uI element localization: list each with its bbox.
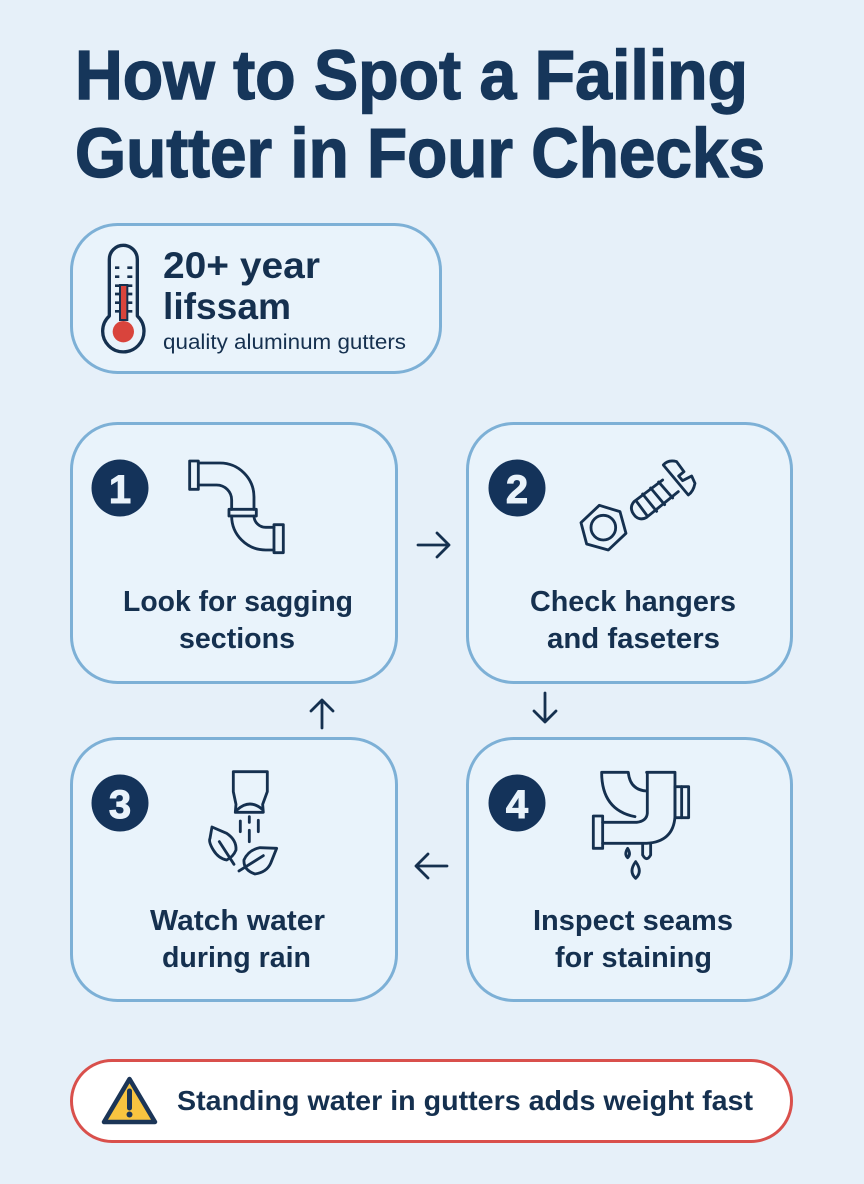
icon: spout and leaves xyxy=(210,772,277,874)
icon: bolt and nut xyxy=(581,461,695,550)
title: How to Spot a Failing xyxy=(75,36,748,114)
badge 1: 1 xyxy=(109,468,131,512)
badge 3 xyxy=(92,774,148,832)
step 4 label: Inspect seams xyxy=(533,905,733,937)
stat heading: 20+ year xyxy=(163,245,320,286)
step 1 label: sections xyxy=(179,623,295,655)
badge 4: 4 xyxy=(506,783,529,827)
badge 2: 2 xyxy=(506,468,528,512)
badge 2 xyxy=(488,460,546,516)
icon: curved pipe xyxy=(190,461,283,553)
warning text: Standing water in gutters adds weight fast xyxy=(177,1085,753,1116)
stat heading: lifssam xyxy=(163,286,291,327)
icon: thermometer xyxy=(103,245,144,352)
badge 4 xyxy=(488,774,546,832)
icon: warning triangle xyxy=(104,1079,155,1122)
step 3 label xyxy=(150,905,325,974)
step 2 label xyxy=(530,586,736,655)
step 2 label: Check hangers xyxy=(530,586,736,618)
step 1 label xyxy=(123,586,353,655)
panel: step 3 xyxy=(72,738,396,1000)
panel: step 2 xyxy=(468,424,792,682)
stat caption: quality aluminum gutters xyxy=(163,331,406,354)
panel: lifespan stat xyxy=(72,224,440,372)
panel: step 1 xyxy=(72,424,396,682)
stat heading xyxy=(163,245,320,327)
panel: step 4 xyxy=(468,738,792,1000)
arrow: step 4 to 3 xyxy=(416,854,447,878)
arrow: step 1 to 2 xyxy=(418,533,449,557)
badge 1 xyxy=(92,460,148,516)
title xyxy=(75,36,765,192)
arrow: step 3 to 1 xyxy=(311,700,333,728)
icon: leaking pipe elbow xyxy=(593,772,689,878)
step 3 label: during rain xyxy=(162,942,311,974)
step 3 label: Watch water xyxy=(150,905,325,937)
step 4 label: for staining xyxy=(555,942,712,974)
step 1 label: Look for sagging xyxy=(123,586,353,618)
step 4 label xyxy=(533,905,733,974)
step 2 label: and faseters xyxy=(547,623,720,655)
title: Gutter in Four Checks xyxy=(75,114,765,192)
arrow: step 2 to 4 xyxy=(534,693,556,722)
callout: warning xyxy=(72,1060,792,1142)
badge 3: 3 xyxy=(109,783,131,827)
